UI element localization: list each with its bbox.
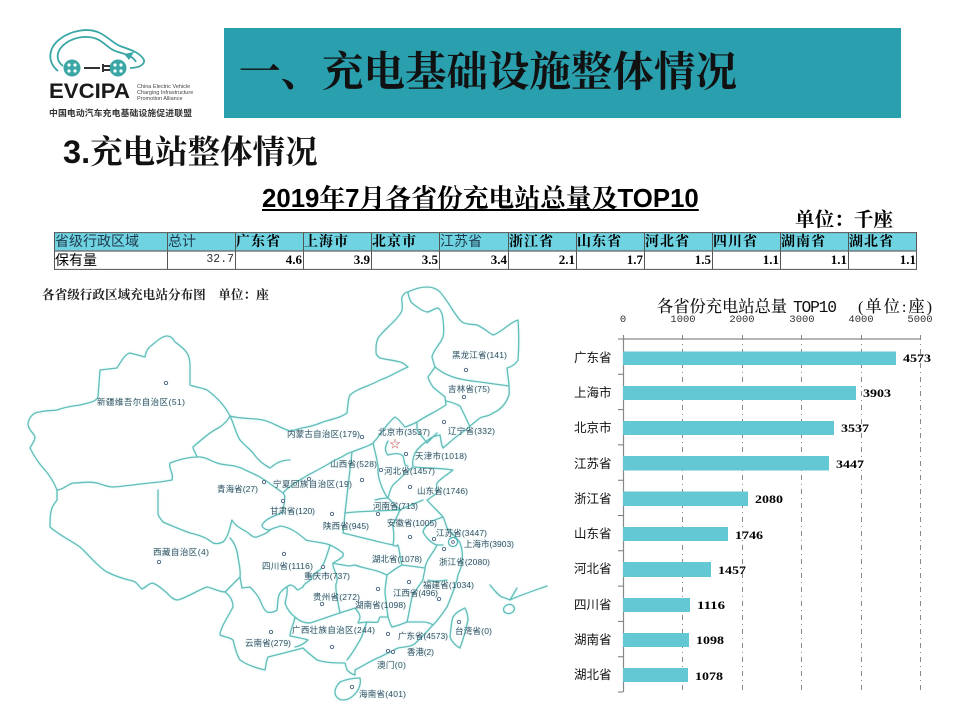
bar: 广东省: 广东省 [574, 351, 612, 365]
region: 澳门: 澳门(0) [377, 660, 406, 670]
map title: 各省级行政区域充电站分布图 单位：座 [42, 288, 269, 302]
logo: EVCIPA: 中国电动汽车充电基础设施促进联盟 [49, 107, 192, 118]
data table: 北京市 [372, 235, 417, 250]
data table: 四川省 [713, 235, 758, 250]
region: 青海 [217, 480, 266, 494]
value axis [618, 314, 933, 692]
map outlines [28, 287, 547, 700]
South China Sea lines [490, 585, 547, 600]
bar: 山东省: 1746 [735, 530, 763, 542]
region: 台湾 [455, 620, 492, 636]
data table: 1.1 [831, 252, 847, 267]
bar: 广东省 [574, 351, 931, 365]
data table: 1.5 [695, 252, 711, 267]
region: 天津: 天津市(1018) [415, 451, 467, 461]
bar: 河北省: 河北省 [574, 562, 612, 576]
region: 西藏: 西藏自治区(4) [153, 547, 209, 557]
region: 宁夏: 宁夏回族自治区(19) [273, 479, 352, 489]
bar: 广东省: 4573 [903, 353, 931, 365]
bar: 湖南省 [574, 632, 724, 647]
unit label: 单位：千座 [795, 210, 893, 231]
chart title: (单位:座) [858, 297, 932, 316]
logo: EVCIPA: China Electric Vehicle [137, 84, 190, 90]
bar: 上海市: 上海市 [574, 385, 612, 400]
region: 吉林 [448, 384, 490, 399]
bar: 湖南省: 1098 [696, 635, 724, 647]
region: 广东: 广东省(4573) [398, 631, 448, 641]
region: 青海: 青海省(27) [217, 484, 258, 494]
region: 浙江: 浙江省(2080) [439, 557, 490, 567]
value axis: 3000 [789, 314, 815, 326]
bar: 湖北省 [574, 667, 723, 683]
heading: section 3: 3.充电站整体情况 [63, 134, 318, 170]
value axis: 2000 [729, 314, 755, 326]
region: 河南 [373, 501, 418, 516]
region: 江苏: 江苏省(3447) [436, 528, 487, 538]
region: 安徽: 安徽省(1005) [387, 518, 437, 528]
title banner [224, 28, 901, 118]
bar: 四川省: 1116 [697, 600, 725, 612]
data table: 江苏省 [440, 233, 482, 249]
data table: 2.1 [559, 252, 575, 267]
region: 广西: 广西壮族自治区(244) [292, 625, 375, 635]
region: 海南 [350, 685, 406, 699]
region: 山东: 山东省(1746) [417, 486, 468, 496]
logo: EVCIPA: Promotion Alliance [137, 96, 183, 102]
data table: 3.4 [491, 252, 507, 267]
region: 福建 [423, 580, 474, 601]
region: 云南: 云南省(279) [245, 638, 291, 648]
region: 吉林: 吉林省(75) [448, 384, 490, 394]
bar: 北京市 [574, 420, 869, 435]
bar: 四川省 [574, 598, 725, 612]
region: 甘肃 [270, 499, 315, 516]
region: 湖北: 湖北省(1078) [372, 554, 422, 564]
bar: 北京市: 3537 [841, 423, 869, 435]
logo: EVCIPA: Charging Infrastructure [137, 90, 193, 96]
region: 澳门 [377, 649, 406, 670]
region: 福建: 福建省(1034) [423, 580, 474, 590]
data table: 3.9 [354, 252, 370, 267]
region: 海南: 海南省(401) [359, 689, 406, 699]
region: 西藏 [153, 547, 209, 564]
region: 重庆: 重庆市(737) [304, 571, 350, 581]
chart title: TOP10 [793, 298, 837, 317]
region: 新疆 [97, 381, 185, 407]
region: 陕西 [323, 512, 369, 531]
region: 山西 [330, 459, 377, 482]
region: 香港 [391, 647, 434, 657]
data table [54, 232, 917, 270]
region: 重庆 [304, 565, 350, 581]
chart title [657, 297, 932, 317]
data table: 上海市 [304, 235, 349, 250]
data table: 4.6 [286, 252, 302, 267]
bar: 浙江省: 2080 [755, 494, 783, 506]
value axis: 0 [620, 314, 626, 326]
region: 河南: 河南省(713) [373, 501, 418, 511]
heading: main title: 一、充电基础设施整体情况 [239, 49, 737, 95]
region: 新疆: 新疆维吾尔自治区(51) [97, 397, 185, 407]
region: 安徽 [387, 518, 437, 539]
data table: 山东省 [577, 235, 622, 250]
region: 台湾: 台湾省(0) [455, 626, 492, 636]
bar: 山东省 [574, 527, 763, 542]
data table: 浙江省 [509, 235, 554, 250]
region: 广西 [292, 625, 375, 649]
bar: 上海市 [574, 385, 891, 400]
bar: 河北省 [574, 562, 746, 577]
bar: 江苏省: 3447 [836, 459, 864, 471]
map of China [26, 286, 548, 702]
region: 辽宁 [442, 420, 495, 436]
region: 四川 [262, 552, 313, 571]
data table: 湖北省 [849, 235, 894, 250]
region: 香港: 香港(2) [407, 647, 434, 657]
bar: 上海市: 3903 [863, 388, 891, 400]
data table: 1.1 [900, 252, 916, 267]
region: 山西: 山西省(528) [330, 459, 377, 469]
data table: 32.7 [206, 253, 234, 266]
data table: 3.5 [422, 252, 438, 267]
bar: 湖北省: 湖北省 [574, 667, 612, 682]
value axis: 5000 [907, 314, 933, 326]
logo: EVCIPA: EVCIPA [49, 80, 130, 103]
bar chart [574, 297, 933, 692]
region: 甘肃: 甘肃省(120) [270, 506, 315, 516]
region: 云南 [245, 630, 291, 648]
region: 湖南 [355, 587, 406, 610]
region: 贵州: 贵州省(272) [313, 592, 360, 602]
bar: 江苏省: 江苏省 [574, 456, 612, 471]
region: 黑龙江: 黑龙江省(141) [452, 350, 507, 360]
data table: 湖南省 [781, 235, 826, 250]
value axis: 4000 [848, 314, 874, 326]
bar: 浙江省: 浙江省 [574, 491, 612, 506]
region: 河北: 河北省(1457) [384, 466, 435, 476]
region: 四川: 四川省(1116) [262, 561, 313, 571]
logo: EVCIPA [49, 29, 194, 118]
bar: 四川省: 四川省 [574, 598, 612, 612]
region: 江西 [393, 580, 438, 598]
bar: 湖北省: 1078 [695, 671, 723, 683]
region: 陕西: 陕西省(945) [323, 521, 369, 531]
heading: table title: 2019年7月各省份充电站总量及TOP10 [262, 185, 699, 213]
region: 浙江 [439, 547, 490, 567]
capital star: ☆ [390, 438, 400, 450]
data table: 省级行政区域 [55, 233, 139, 249]
region: 黑龙江 [452, 350, 507, 372]
Shanghai ring [448, 538, 458, 546]
Taiwan [450, 608, 468, 648]
data table: 1.7 [627, 252, 643, 267]
bar: 河北省: 1457 [718, 565, 746, 577]
bar: 江苏省 [574, 456, 864, 471]
region: 上海: 上海市(3903) [464, 539, 514, 549]
bar: 山东省: 山东省 [574, 527, 612, 541]
data table: 总计 [168, 233, 196, 249]
data table: 1.1 [763, 252, 779, 267]
data table: 河北省 [645, 235, 690, 250]
region: 江西: 江西省(496) [393, 588, 438, 598]
data table: 保有量 [55, 252, 97, 268]
bar: 浙江省 [574, 491, 783, 506]
region: 北京: 北京市(3537) [378, 427, 430, 437]
region: 内蒙古: 内蒙古自治区(179) [287, 429, 360, 439]
region: 辽宁: 辽宁省(332) [448, 426, 495, 436]
chart title: 各省份充电站总量 [657, 297, 787, 316]
Hainan [335, 678, 360, 700]
bar: 北京市: 北京市 [574, 420, 612, 435]
data table: 广东省 [236, 235, 281, 250]
value axis: 1000 [670, 314, 696, 326]
region: 湖南: 湖南省(1098) [355, 600, 406, 610]
bar: 湖南省: 湖南省 [574, 632, 612, 647]
